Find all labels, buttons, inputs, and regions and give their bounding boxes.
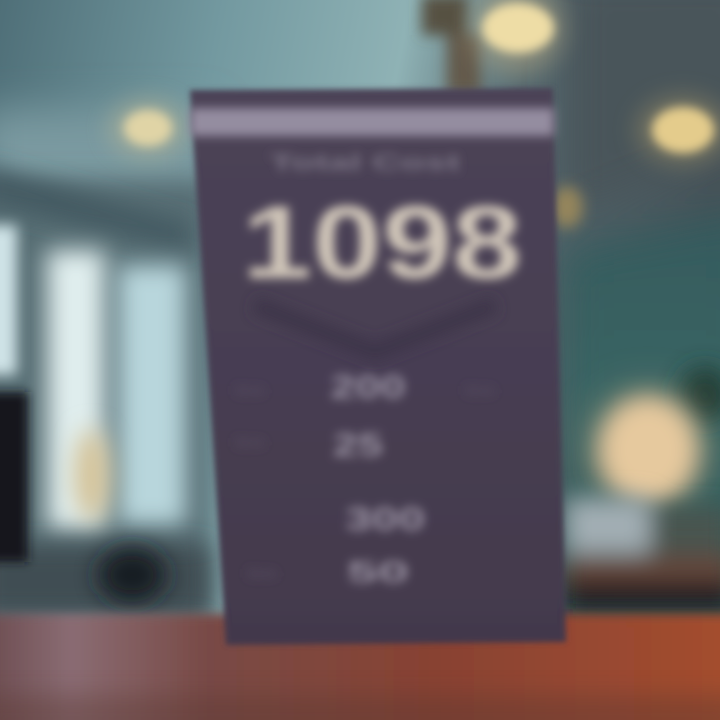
small wall light (551, 186, 583, 228)
poster row 2: Item (236, 434, 264, 450)
poster row 2 (236, 427, 383, 463)
poster heading band (190, 108, 554, 136)
right side furniture (565, 498, 720, 608)
poster (190, 88, 566, 645)
poster row 1: Item (466, 382, 494, 398)
poster row 1: Item (236, 382, 264, 398)
ceiling light: right (637, 96, 720, 164)
ceiling light: left (110, 100, 186, 156)
ceiling fixture (422, 0, 481, 95)
lamp globe (586, 388, 710, 512)
poster row 2: 25 (333, 427, 383, 463)
poster subheading: Total Cost (270, 150, 461, 175)
poster big number: 1098 (242, 185, 522, 301)
poster board (190, 88, 566, 645)
ceiling light: top centre (472, 0, 564, 74)
plant: right (679, 367, 720, 423)
background: left windows (0, 165, 210, 620)
dark object: left chair (98, 547, 166, 603)
dark object: left edge (0, 392, 28, 562)
poster row 4 (248, 556, 409, 589)
background: right wall (560, 0, 720, 640)
poster row 1 (236, 369, 494, 405)
poster divider chevron (255, 305, 495, 352)
table (0, 614, 720, 720)
poster row 4: 50 (347, 556, 409, 589)
poster row 1: 200 (330, 369, 406, 405)
poster row 3: 300 (345, 501, 425, 537)
poster row 4: Item (248, 565, 276, 581)
